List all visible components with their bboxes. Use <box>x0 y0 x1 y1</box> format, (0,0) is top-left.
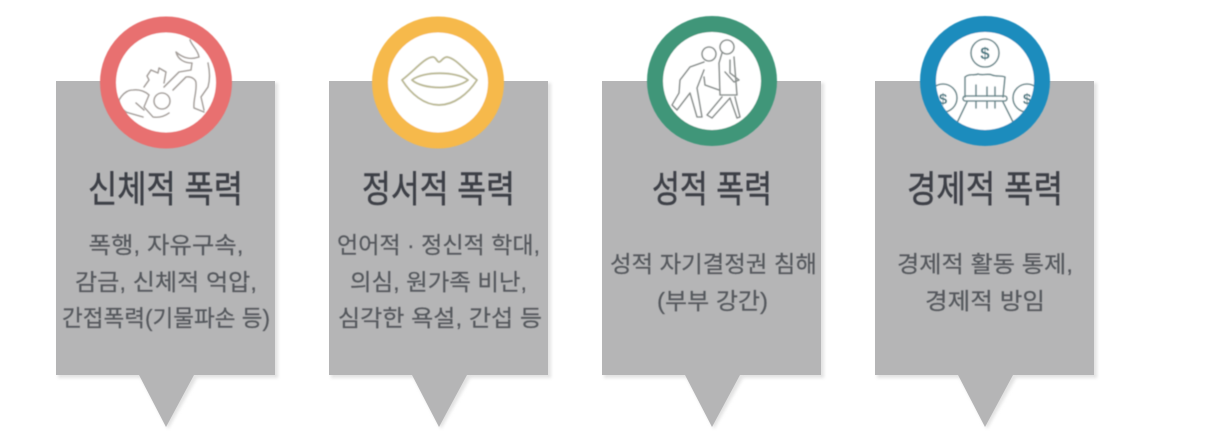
panel: emotional violence <box>329 24 551 429</box>
icon: emotional violence <box>380 24 496 140</box>
text: physical violence description: 폭행, 자유구속, <box>88 232 244 258</box>
text: emotional violence description: 심각한 욕설, 간섭 등 <box>338 305 542 331</box>
panel: sexual violence <box>602 24 824 429</box>
text: economic violence description: 경제적 활동 통제, <box>897 251 1073 277</box>
text: emotional violence description: 의심, 원가족 비난, <box>350 269 527 295</box>
icon: economic violence: $ <box>1023 91 1032 108</box>
text: emotional violence description <box>337 232 542 331</box>
title: physical violence: 신체적 폭력 <box>88 169 243 210</box>
icon: economic violence: $ <box>939 91 948 108</box>
icon: economic violence: $ <box>980 44 990 63</box>
text: economic violence description <box>897 251 1073 314</box>
text: sexual violence description: (부부 강간) <box>657 288 768 314</box>
icon: economic violence <box>928 24 1042 138</box>
panel: economic violence <box>875 24 1097 429</box>
title: sexual violence: 성적 폭력 <box>652 169 772 210</box>
text: economic violence description: 경제적 방임 <box>925 288 1045 314</box>
text: physical violence description: 간접폭력(기물파손 등) <box>62 305 270 331</box>
text: sexual violence description: 성적 자기결정권 침해 <box>610 251 817 277</box>
text: sexual violence description <box>610 251 817 314</box>
text: physical violence description <box>62 232 270 331</box>
text: emotional violence description: 언어적 · 정신적 학대, <box>337 232 540 258</box>
icon: physical violence <box>108 24 224 140</box>
panel: physical violence <box>56 24 278 429</box>
title: economic violence: 경제적 폭력 <box>907 169 1063 210</box>
icon: sexual violence <box>655 24 769 138</box>
title: emotional violence: 정서적 폭력 <box>362 169 515 210</box>
text: physical violence description: 감금, 신체적 억압, <box>75 269 257 295</box>
